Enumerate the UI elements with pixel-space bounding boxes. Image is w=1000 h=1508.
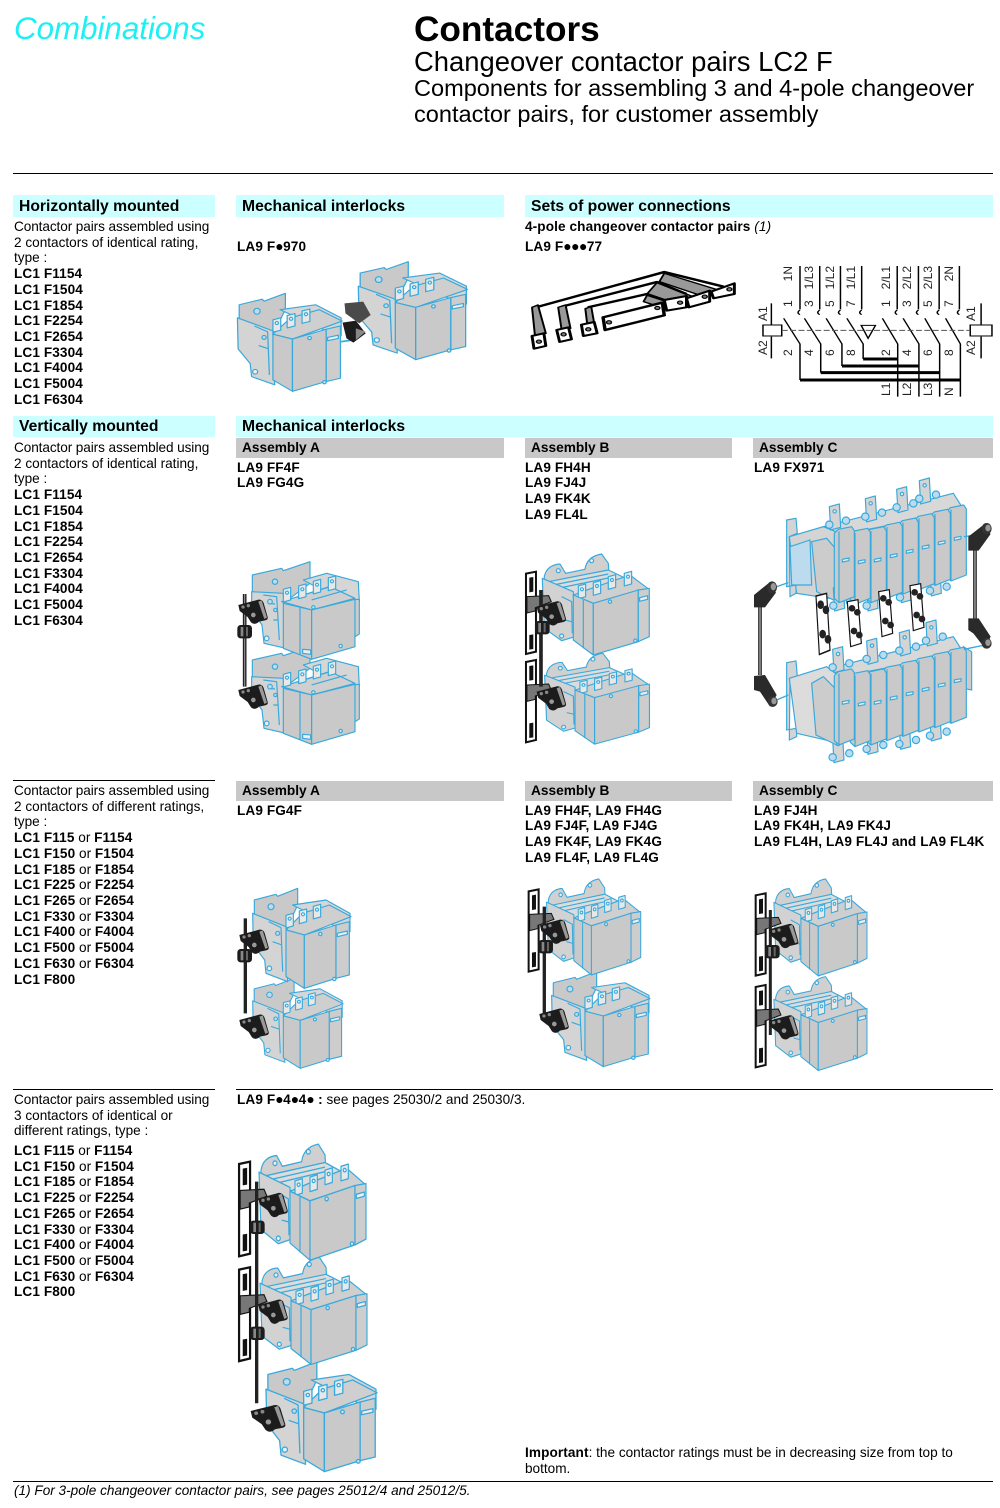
wiring diagram: changeover contacts: 1/L3 [802,266,816,289]
wiring diagram: changeover contacts: 4 [802,349,816,356]
wiring diagram: changeover contacts: 5 [823,300,837,307]
heading: Vertically mounted [13,416,215,437]
wiring diagram: changeover contacts: 3 [900,300,914,307]
text: different ratings contactor list: Contactor pairs assembled using 2 contactors of different ratings, type : LC1 F115 or F1154 LC1 F150 or F1504 LC1 F185 or F1854 LC1 F225 or F2254 LC1 F265 or F2654 LC1 F330 or F3304 LC1 F400 or F4004 LC1 F500 or F5004 LC1 F630 or F6304 LC1 F800 [14,783,209,987]
references: assembly B, different ratings: LA9 FH4F, LA9 FH4G LA9 FJ4F, LA9 FJ4G LA9 FK4F, LA9 FK4G LA9 FL4F, LA9 FL4G [525,802,662,865]
wiring diagram: changeover contacts: 7 [942,300,956,307]
top bank of contactors [787,478,966,611]
subtitle: Changeover contactor pairs LC2 F [414,46,833,77]
wiring diagram: changeover contacts: 5 [921,300,935,307]
text: 4-pole changeover pairs: 4-pole changeover contactor pairs (1) [525,219,771,234]
references: assembly B: LA9 FH4H LA9 FJ4J LA9 FK4K LA9 FL4L [525,460,591,522]
wiring diagram: changeover contacts: 8 [942,349,956,356]
wiring diagram: changeover contacts: 8 [844,349,858,356]
wiring diagram: changeover contacts: 6 [921,349,935,356]
wiring diagram: changeover contacts: 2N [942,266,956,281]
bar: Assembly A: Assembly A [242,440,320,455]
heading: Mechanical interlocks (vertical): Mechanical interlocks [242,418,405,435]
wiring diagram: changeover contacts: 1/L2 [823,266,837,289]
bar: Assembly B: Assembly B [531,440,609,455]
wiring diagram: changeover contacts: L3 [921,382,935,396]
description: Components for assembling 3 and 4-pole changeover contactor pairs, for customer assembly [414,75,974,127]
text: see pages reference: LA9 F●4●4● : see pages 25030/2 and 25030/3. [237,1091,525,1107]
wiring diagram: changeover contacts: A2 [756,340,770,355]
bar: Assembly C, different ratings [753,781,993,801]
wiring diagram: changeover contacts [756,266,992,397]
text: horizontally mounted contactor list: Contactor pairs assembled using 2 contactors of identical rating, type : LC1 F1154 LC1 F1504 LC1 F1854 LC1 F2254 LC1 F2654 LC1 F3304 LC1 F4004 LC1 F5004 LC1 F6304 [14,219,209,407]
illustration: different ratings assembly A [237,888,351,1068]
references: assembly C, different ratings: LA9 FJ4H LA9 FK4H, LA9 FK4J LA9 FL4H, LA9 FL4J and LA9 FL4K [754,802,984,849]
wiring diagram: changeover contacts: 4 [900,349,914,356]
wiring diagram: changeover contacts: 1 [781,300,795,307]
wiring diagram: changeover contacts: 2 [781,349,795,356]
heading: Horizontally mounted [13,195,215,217]
footnote: (1) For 3-pole changeover contactor pairs, see pages 25012/4 and 25012/5. [14,1483,470,1498]
wiring diagram: changeover contacts: 7 [844,300,858,307]
connecting rods [754,523,992,707]
wiring diagram: changeover contacts: N [942,387,956,396]
illustration: different ratings assembly B [529,879,650,1067]
section title: Combinations: Combinations [14,11,205,46]
heading: Vertically mounted: Vertically mounted [19,418,158,435]
bar: Assembly A, different ratings: Assembly A [242,783,320,798]
heading: Mechanical interlocks (horizontal) [236,195,504,217]
references: assembly C: LA9 FX971 [754,460,824,474]
label: LA9 F970: LA9 F●970 [237,238,306,254]
bar: Assembly C [753,438,993,458]
illustration: vertical assembly A [237,562,359,744]
wiring diagram: changeover contacts: L2 [900,382,914,396]
wiring diagram: changeover contacts: 1 [879,300,893,307]
wiring diagram: changeover contacts: 2/L1 [879,266,893,289]
wiring diagram: changeover contacts: 6 [823,349,837,356]
illustration: power connection busbars [532,272,734,349]
callout: important note: Important: the contactor ratings must be in decreasing size from top to bottom. [525,1445,953,1476]
wiring diagram: changeover contacts: 1/L1 [844,266,858,289]
heading: Horizontally mounted: Horizontally mounted [19,198,179,215]
wiring diagram: changeover contacts: A1 [964,306,978,321]
wiring diagram: changeover contacts: 3 [802,300,816,307]
bar: Assembly B [525,438,732,458]
wiring diagram: changeover contacts: 1N [781,266,795,281]
heading: Sets of power connections [525,195,993,217]
bar: Assembly A [236,438,504,458]
heading: Mechanical interlocks (horizontal): Mechanical interlocks [242,198,405,215]
wiring diagram: changeover contacts: L1 [879,382,893,396]
wiring diagram: changeover contacts: A1 [756,306,770,321]
illustration: different ratings assembly C [756,879,867,1071]
illustration: three-contactor assembly [239,1144,377,1472]
illustration: horizontal interlock assembly [237,262,467,391]
text: vertically mounted contactor list: Contactor pairs assembled using 2 contactors of identical rating, type : LC1 F1154 LC1 F1504 LC1 F1854 LC1 F2254 LC1 F2654 LC1 F3304 LC1 F4004 LC1 F5004 LC1 F6304 [14,440,209,628]
references: assembly A: LA9 FF4F LA9 FG4G [237,460,304,490]
main title: Contactors: Contactors [414,10,600,49]
bar: Assembly C: Assembly C [759,440,837,455]
heading: Mechanical interlocks (vertical) [236,416,993,437]
references: assembly A, different ratings: LA9 FG4F [237,802,302,818]
wiring diagram: changeover contacts: 2 [879,349,893,356]
label: LA9 F77: LA9 F●●●77 [525,238,602,254]
bar: Assembly B, different ratings [525,781,732,801]
wiring diagram: changeover contacts: 2/L2 [900,266,914,289]
bottom bank of contactors [787,620,972,763]
wiring diagram: changeover contacts: 2/L3 [921,266,935,289]
bar: Assembly C, different ratings: Assembly C [759,783,837,798]
bar: Assembly A, different ratings [236,781,504,801]
heading: Sets of power connections: Sets of power connections [531,198,731,215]
wiring diagram: changeover contacts: A2 [964,340,978,355]
illustration: vertical assembly B [526,554,649,744]
text: three-contactor list: Contactor pairs assembled using 3 contactors of identical or different ratings, type : [14,1092,209,1138]
illustration: vertical assembly C [754,478,992,763]
bar: Assembly B, different ratings: Assembly B [531,783,609,798]
list: three-contactor ratings: LC1 F115 or F1154 LC1 F150 or F1504 LC1 F185 or F1854 LC1 F225 or F2254 LC1 F265 or F2654 LC1 F330 or F3304 LC1 F400 or F4004 LC1 F500 or F5004 LC1 F630 or F6304 LC1 F800 [14,1143,134,1299]
